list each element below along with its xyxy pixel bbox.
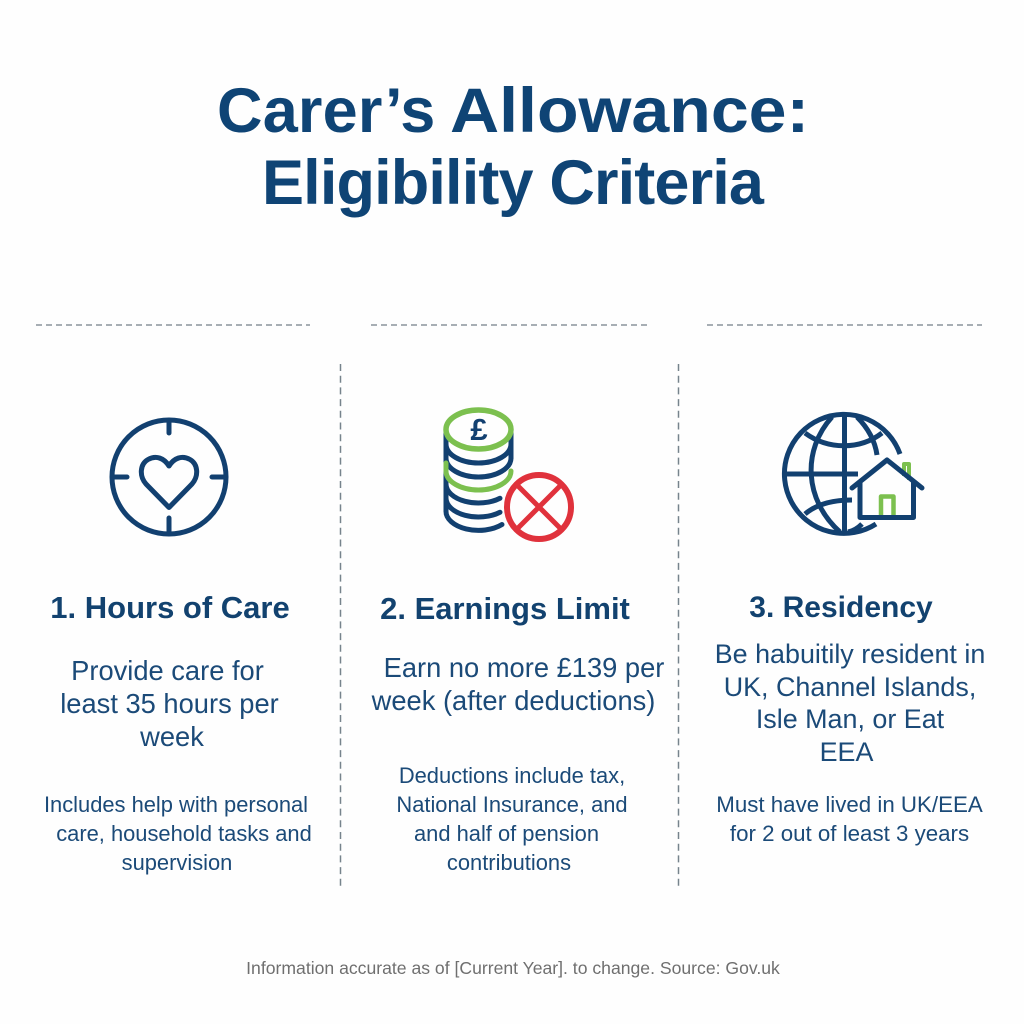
text: deductions detail: National Insurance, and [396, 792, 628, 817]
text: residency requirement [715, 639, 985, 766]
heading: hours of care: 1. Hours of Care [50, 590, 290, 625]
footer note: Information accurate as of [Current Year]. to change. Source: Gov.uk [246, 958, 780, 978]
text: residency requirement: Isle Man, or Eat [756, 704, 944, 734]
text: earnings requirement [372, 652, 664, 716]
text: deductions detail: contributions [447, 850, 571, 875]
text: residency requirement: Be habuitily resident in [715, 639, 985, 669]
title: Eligibility Criteria [262, 148, 763, 218]
text: hours requirement [60, 655, 279, 752]
title [217, 76, 809, 218]
text: hours requirement: least 35 hours per [60, 688, 279, 719]
text: care detail: supervision [122, 850, 232, 874]
text: hours requirement: week [140, 721, 204, 752]
text: care detail: Includes help with personal [44, 792, 308, 816]
title: Allowance: [450, 76, 809, 146]
icon: pound symbol: £ [470, 412, 488, 447]
heading: residency: 3. Residency [749, 591, 933, 624]
text: residency detail [716, 792, 983, 846]
text: earnings requirement: week (after deductions) [372, 685, 655, 716]
icon: heart in target circle [110, 418, 228, 536]
text: deductions detail [396, 763, 628, 875]
text: care detail: care, household tasks and [56, 820, 312, 846]
title: Carer’s [217, 76, 436, 146]
text: residency detail: for 2 out of least 3 years [730, 821, 969, 846]
text: deductions detail: and half of pension [414, 821, 599, 846]
heading: earnings limit: 2. Earnings Limit [380, 590, 630, 626]
text: deductions detail: Deductions include tax, [399, 763, 625, 788]
text: residency detail: Must have lived in UK/EEA [716, 792, 983, 817]
text: care detail [44, 792, 312, 874]
icon: globe with house [782, 412, 924, 536]
icon: coin stack with red cross [443, 407, 574, 542]
text: residency requirement: UK, Channel Islands, [724, 672, 976, 702]
text: earnings requirement: Earn no more £139 per [384, 652, 664, 683]
text: residency requirement: EEA [820, 736, 873, 766]
text: hours requirement: Provide care for [71, 655, 264, 686]
